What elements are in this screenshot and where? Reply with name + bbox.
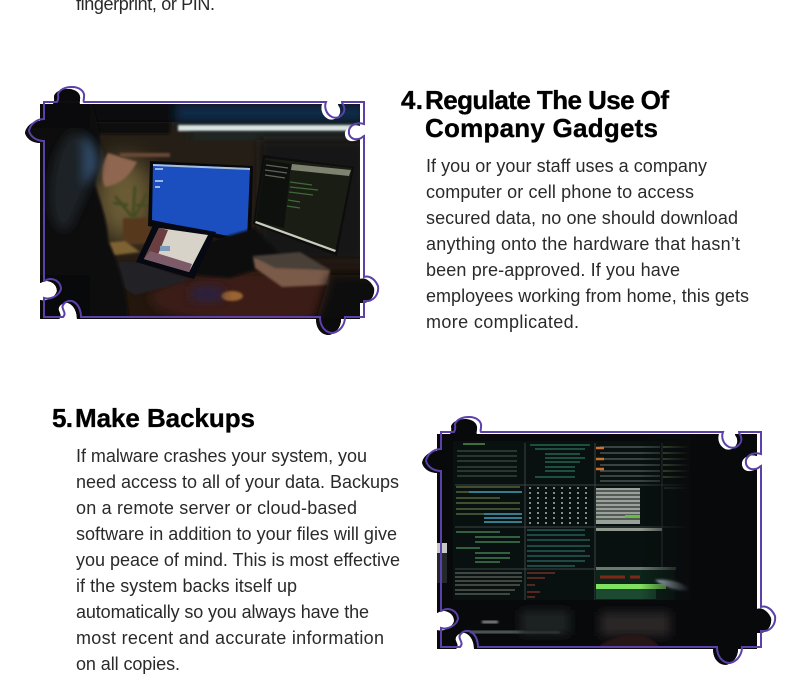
text: step 5 body xyxy=(76,446,400,674)
text: step 4 body: anything onto the hardware that hasn’t xyxy=(426,234,740,254)
text: step 5 body: If malware crashes your system, you xyxy=(76,446,367,466)
text: step 4 body: If you or your staff uses a company xyxy=(426,156,707,176)
text: step 5 body: on a remote server or cloud-based xyxy=(76,498,357,518)
text: step 4 body: been pre-approved. If you have xyxy=(426,260,680,280)
text: step 5 body: if the system backs itself up xyxy=(76,576,297,596)
photo: woman at computer monitors in puzzle frame xyxy=(20,85,385,342)
heading: step 4: 4. xyxy=(401,85,423,115)
text: step 5 body: you peace of mind. This is most effective xyxy=(76,550,400,570)
text: step 4 body: secured data, no one should download xyxy=(426,208,738,228)
photo: terminal screen in puzzle frame xyxy=(415,415,790,670)
text: step 4 body: more complicated. xyxy=(426,312,579,332)
heading: step 4: Regulate The Use Of xyxy=(425,85,669,115)
text: step 4 body: computer or cell phone to access xyxy=(426,182,694,202)
heading: step 4 xyxy=(401,85,669,143)
text: step 5 body: software in addition to your files will give xyxy=(76,524,397,544)
text: step 4 body xyxy=(426,156,749,332)
heading: step 4: Company Gadgets xyxy=(425,113,658,143)
heading: step 5: 5. xyxy=(52,403,73,433)
text: step 4 body: employees working from home, this gets xyxy=(426,286,749,306)
text: step 5 body: most recent and accurate information xyxy=(76,628,384,648)
text: step 5 body: on all copies. xyxy=(76,654,180,674)
text: step 5 body: need access to all of your data. Backups xyxy=(76,472,399,492)
heading: step 5: Make Backups xyxy=(75,403,255,433)
text: step 5 body: automatically so you always have the xyxy=(76,602,369,622)
